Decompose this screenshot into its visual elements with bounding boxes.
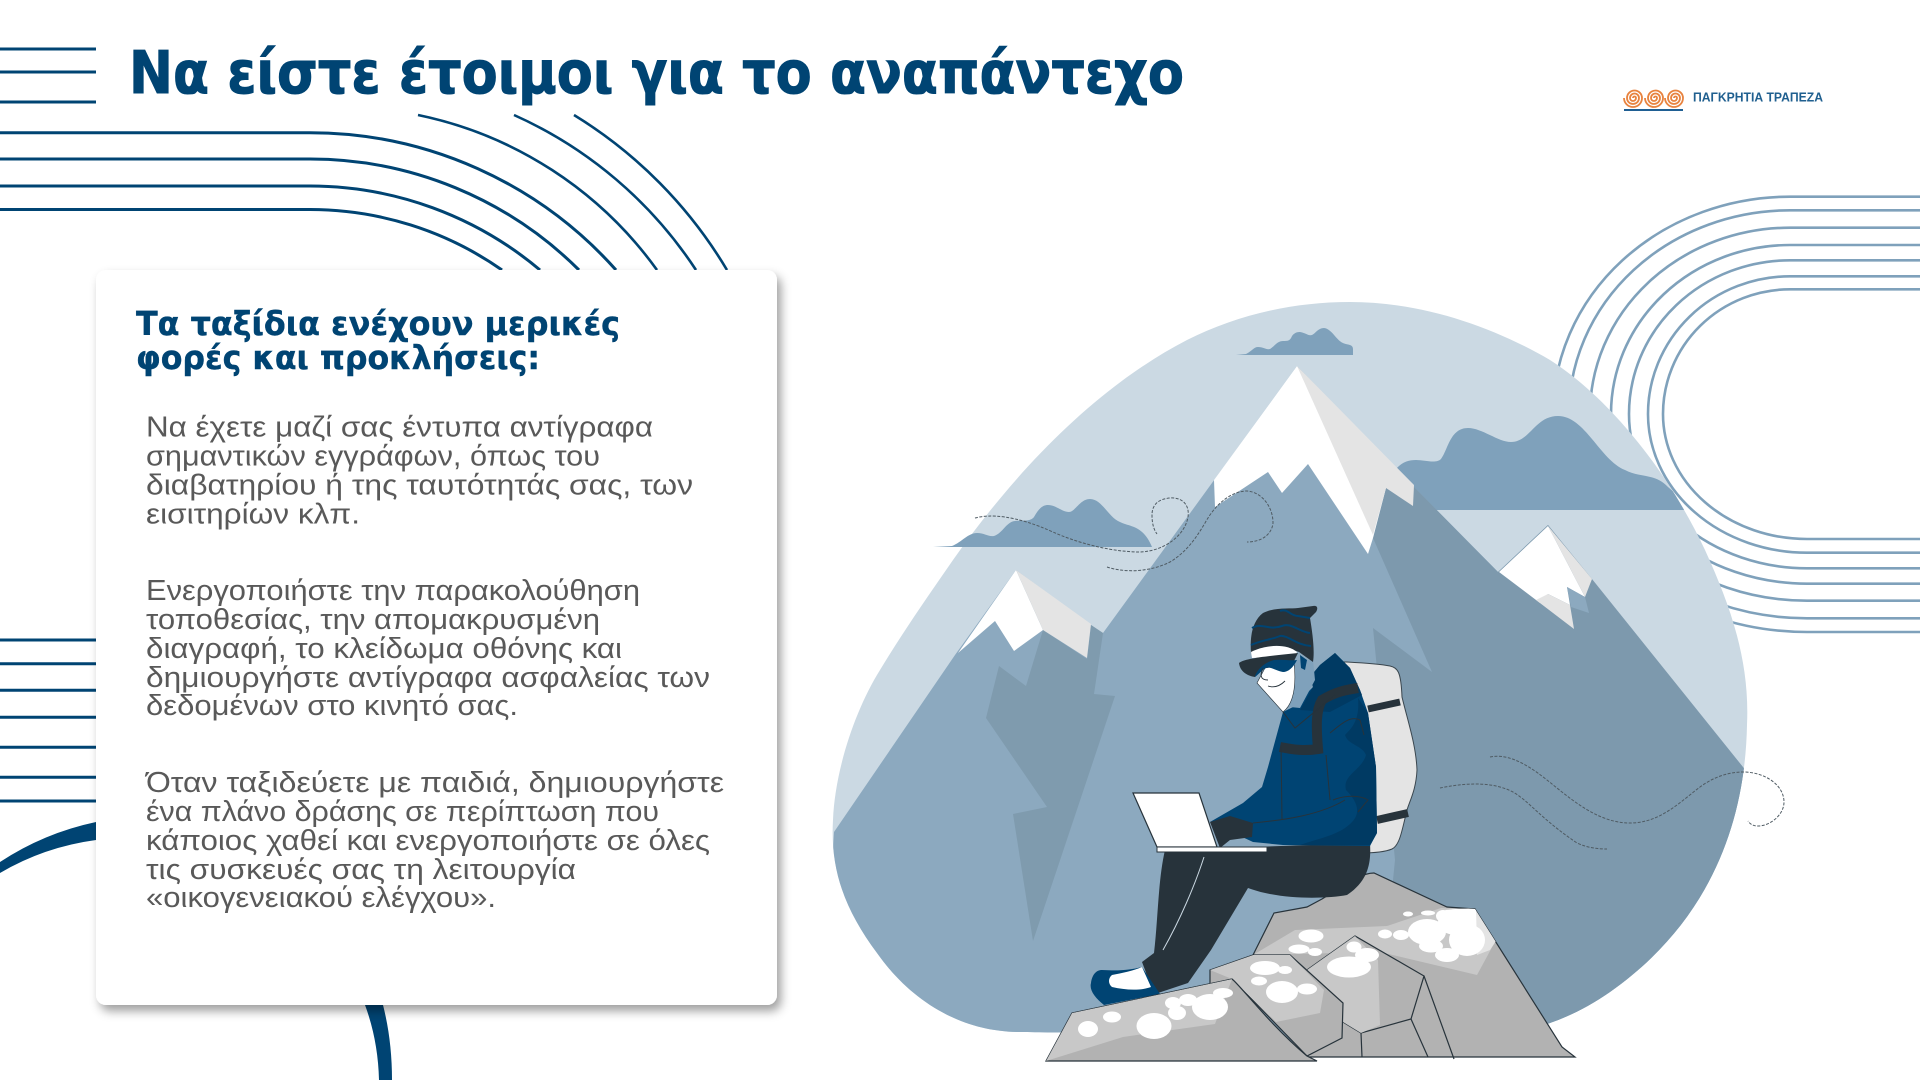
paragraph 1: Να έχετε μαζί σας έντυπα αντίγραφα bbox=[146, 412, 653, 444]
paragraph 2: Ενεργοποιήστε την παρακολούθηση bbox=[146, 575, 640, 607]
decorative lines top left bbox=[0, 49, 727, 270]
rock: back right bbox=[1253, 873, 1575, 1057]
mountain: light face bbox=[820, 366, 1760, 1070]
paragraph 2: δεδομένων στο κινητό σας. bbox=[146, 690, 518, 722]
logo: Pancreta Bank: ΠΑΓΚΡΗΤΙΑ ΤΡΑΠΕΖΑ bbox=[1693, 90, 1824, 104]
paragraph 3: ένα πλάνο δράσης σε περίπτωση που bbox=[146, 796, 659, 828]
cloud: top bbox=[1236, 328, 1353, 355]
snow: right peak shade bbox=[1536, 526, 1592, 629]
mountains bbox=[820, 366, 1770, 1070]
rocks bbox=[1210, 873, 1575, 1059]
title: Να είστε έτοιμοι για το αναπάντεχο bbox=[129, 38, 1184, 107]
paragraph 2: δημιουργήστε αντίγραφα ασφαλείας των bbox=[146, 662, 710, 694]
card heading bbox=[136, 304, 620, 377]
mountain: left shadow bbox=[986, 625, 1115, 941]
paragraph 1: εισιτηρίων κλπ. bbox=[146, 498, 360, 530]
blob backdrop bbox=[833, 302, 1747, 1050]
person: glove bbox=[1210, 816, 1253, 848]
wind lines bbox=[975, 491, 1784, 849]
paragraph 1: σημαντικών εγγράφων, όπως του bbox=[146, 440, 600, 472]
paragraph 1: διαβατηρίου ή της ταυτότητάς σας, των bbox=[146, 470, 693, 502]
person: trouser crease bbox=[1163, 857, 1204, 950]
decorative lines left bbox=[0, 640, 96, 801]
snow: right peak bbox=[1499, 526, 1585, 605]
person: backpack bbox=[1340, 662, 1417, 853]
panel: text card bbox=[96, 270, 777, 1005]
rock: middle bbox=[1210, 955, 1343, 1056]
decorative thick arc bbox=[0, 822, 392, 1080]
logo: Pancreta Bank bbox=[1624, 90, 1824, 110]
snow: left peak bbox=[958, 570, 1043, 653]
mountain: dark face bbox=[1373, 488, 1744, 1024]
snow: main peak bbox=[1214, 366, 1386, 554]
paragraph 3: «οικογενειακού ελέγχου». bbox=[146, 882, 496, 914]
snow: left peak shade bbox=[1016, 570, 1091, 658]
rock: front bbox=[1046, 979, 1317, 1061]
person: laptop bbox=[1133, 793, 1267, 852]
illustration: mountain scene bbox=[820, 302, 1784, 1070]
person: shoe bbox=[1091, 967, 1160, 1005]
person: head bbox=[1239, 606, 1317, 712]
paragraph 3 bbox=[145, 767, 724, 914]
paragraph 2 bbox=[146, 575, 710, 722]
card heading: Τα ταξίδια ενέχουν μερικές bbox=[136, 304, 620, 343]
snow: main peak shade bbox=[1297, 366, 1414, 535]
cloud: large right bbox=[1395, 416, 1695, 510]
paragraph 2: τοποθεσίας, την απομακρυσμένη bbox=[146, 604, 600, 636]
cloud: left bbox=[933, 499, 1152, 547]
paragraph 3: τις συσκευές σας τη λειτουργία bbox=[146, 854, 576, 886]
paragraph 3: κάποιος χαθεί και ενεργοποιήστε σε όλες bbox=[146, 825, 710, 857]
facet: right peak bbox=[1567, 587, 1589, 613]
person: jacket bbox=[1210, 653, 1377, 846]
paragraph 2: διαγραφή, το κλείδωμα οθόνης και bbox=[146, 633, 622, 665]
paragraph 3: Όταν ταξιδεύετε με παιδιά, δημιουργήστε bbox=[145, 767, 724, 799]
card heading: φορές και προκλήσεις: bbox=[136, 338, 540, 377]
person: trousers bbox=[1142, 843, 1370, 993]
rock: centre bbox=[1307, 936, 1454, 1059]
paragraph 1 bbox=[146, 412, 693, 530]
decorative lines right bbox=[1553, 197, 1920, 632]
